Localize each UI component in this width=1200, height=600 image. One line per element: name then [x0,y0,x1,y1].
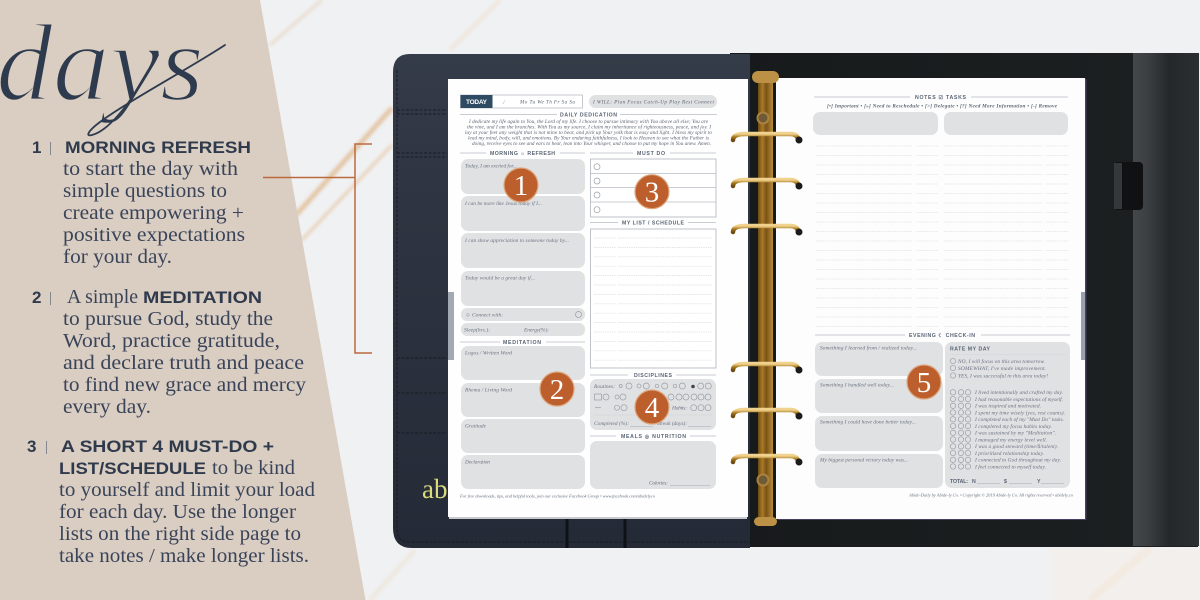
morning refresh heading: MORNING ☼ REFRESH [490,151,555,157]
disciplines box [590,379,716,430]
rings [733,134,798,462]
right tab [1081,292,1085,360]
item 3 text: to be kind [212,457,295,479]
item 3 text [27,437,315,567]
item 3 text: take notes / make longer lists. [59,545,309,567]
item 1 text: positive expectations [63,224,245,246]
title flourish [88,45,225,135]
binder spine strip [1133,53,1199,546]
badge 2 [540,372,574,406]
notes legend: [•] Important • [»] Need to Reschedule • [>] Delegate • [?] Need More Information • [-] Remove [827,104,1058,110]
rate my day panel: I prioritized relationship today. [974,451,1044,457]
dedication paragraph: lead my mind, body, will, and emotions. By Your enduring faithfulness, I look to Heaven to see what the Father is [468,134,709,142]
evening boxes: Something I learned from / realized today... [820,344,917,352]
rate my day panel: NO, I will focus on this area tomorrow. [957,358,1045,365]
notes and tasks heading: NOTES ☑ TASKS [915,95,967,101]
left page [448,79,748,519]
rate my day panel: $ [1004,479,1007,485]
spine bar [758,76,773,525]
morning refresh boxes: Today, I am excited for... [465,162,517,170]
meditation heading [460,340,585,346]
item 1 text: for your day. [63,246,172,268]
left tab [448,292,454,360]
rate my day panel: I spent my time wisely (yes, rest counts). [974,409,1065,416]
item 3 text: LIST/SCHEDULE [59,459,206,478]
item 3 text: lists on the right side page to [59,523,301,545]
must do heading: MUST DO [637,151,665,157]
item 1 text: 1 [32,138,41,157]
disciplines heading [590,373,716,379]
item 1 text: simple questions to [63,180,227,202]
rate my day panel: N [972,479,976,485]
notes rows [816,146,1069,326]
today box [460,95,582,108]
right page [776,78,1086,520]
rate my day panel: I connected to God throughout my day. [974,458,1061,464]
disciplines box: Routines: [593,384,615,390]
morning refresh boxes: I can show appreciation to someone today by... [464,238,569,244]
meditation boxes: Gratitude [465,424,487,430]
script title: days [0,2,204,124]
rate my day panel: I lived intentionally and crafted my day. [974,389,1063,396]
item 3 text: for each day. Use the longer [59,501,296,523]
today box: Mo Tu We Th Fr Sa Su [519,100,575,106]
item 1 text: create empowering + [63,202,244,224]
morning refresh boxes: I can be more like Jesus today if I... [464,200,542,207]
beige side panel [0,0,366,600]
top cap [752,71,779,83]
evening boxes: My biggest personal victory today was... [819,458,908,464]
my list heading [590,220,716,226]
meals heading: MEALS ◎ NUTRITION [621,434,686,440]
item 1 text [32,138,251,268]
item 2 text: A simple [67,286,138,308]
badge 3 [635,175,669,209]
disciplines heading: DISCIPLINES [634,373,673,379]
morning refresh boxes: ☺ Connect with: [465,312,503,318]
evening boxes [815,342,943,488]
item 3 text: 3 [27,437,36,456]
item 2 text: 2 [32,288,41,307]
dedication paragraph [465,118,712,147]
rate my day panel: I was inspired and motivated. [974,404,1041,410]
badge 4 [635,390,669,424]
pen loop tab [1114,162,1143,210]
disciplines box: Streak (days): [657,420,687,427]
morning refresh boxes: Today would be a great day if... [465,274,535,282]
evening check-in heading: EVENING ☾ CHECK-IN [909,333,975,339]
rate my day panel: YES, I was successful in this area today! [958,372,1048,380]
rate my day panel: I completed my focus habits today. [974,423,1052,430]
disciplines box: Habits: [671,406,687,412]
badge 5 [907,365,941,399]
item 3 text: to yourself and limit your load [59,479,315,501]
rivets [758,112,768,486]
item 1 text: MORNING REFRESH [65,138,251,157]
morning refresh boxes: Energy(%): [523,326,549,334]
must do box [590,159,716,217]
meals box: Calories: [649,480,668,486]
meditation boxes: Rhema / Living Word [464,388,512,394]
badge 2: 2 [550,374,564,406]
rate my day panel: I was a good steward (time/$/talent). [974,443,1058,450]
meditation heading: MEDITATION [503,340,541,346]
ring holes [796,136,802,466]
morning refresh heading [460,151,585,157]
rate my day panel: I had reasonable expectations of myself. [974,396,1063,403]
item 1 text: to start the day with [63,158,238,180]
left page sheet [448,79,748,517]
dedication paragraph: the vine, and I am the branches. With You as my source, I claim my inheritance of righteousness, peace, and joy. I [467,124,711,130]
binder [393,53,1199,548]
item 2 text [32,286,306,418]
right footer: Abide-Daily by Abide-ly Co. • Copyright © 2019 Abide-ly Co. All rights reserved • abidely.co [908,492,1074,498]
rate my day panel: SOMEWHAT, I've made improvement. [958,366,1046,372]
meals box [590,441,716,489]
item 2 text: and declare truth and peace [63,352,304,374]
item 2 text: | [49,290,52,306]
bottom cap [754,517,777,526]
rate my day panel: I was sustained by my "Meditation". [974,430,1056,436]
disciplines box: Completed (%): [594,420,629,427]
my list heading: MY LIST / SCHEDULE [622,220,685,226]
item 2 text: to pursue God, study the [63,308,273,330]
gold binder rings [733,71,802,526]
meditation boxes: Declaration [464,460,490,466]
item 2 text: to find new grace and mercy [63,374,306,396]
meals heading [590,434,716,440]
daily dedication heading: DAILY DEDICATION [560,112,617,118]
badge 3: 3 [645,176,659,208]
item 3 text: | [45,439,48,455]
item 2 text: MEDITATION [143,288,262,307]
my list box [590,229,716,368]
binder stitching [397,70,750,548]
item 3 text: A SHORT 4 MUST-DO + [61,437,274,456]
badge 5: 5 [917,367,931,399]
morning refresh boxes: Sleep(hrs.): [464,326,490,334]
bracket connector [263,144,372,353]
notes header boxes [813,112,1068,135]
badge 4: 4 [645,392,660,424]
must do heading [590,151,716,157]
rate my day panel: I managed my energy level well. [974,437,1047,443]
morning refresh boxes [461,159,585,336]
rate my day panel: Y [1037,479,1041,485]
today box: TODAY [466,99,488,106]
rate my day panel: RATE MY DAY [950,346,991,352]
item 1 text: | [49,140,52,156]
today box: / [502,100,505,106]
badge 1: 1 [514,170,528,202]
dedication paragraph: I dedicate my life again to You, the Lord of my life. I choose to pursue intimacy with You above all else; You are [468,118,709,125]
dedication paragraph: doing, receive eyes to see and ears to hear, lean into Your whisper, and choose to put my hope in You anew. Amen. [472,141,711,147]
binder left cover [393,54,750,548]
rate my day panel: I feel connected to myself today. [974,463,1046,470]
binder right cover [730,53,1198,547]
dedication paragraph: lay at your feet any weight that is not mine to bear, and pick up Your yolk that is easy and light. I bless my spirit to [465,129,712,136]
meditation boxes: Logos / Written Word [464,350,512,356]
rate my day panel [945,342,1070,488]
left footer: For free downloads, tips, and helpful tools, join our exclusive Facebook Group • www.facebook.com/abidelyco [459,494,656,500]
I will pill: I WILL: Plan Focus Catch-Up Play Rest Connect [592,100,715,106]
item 2 text: Word, practice gratitude, [63,330,280,352]
right page sheet [776,78,1085,519]
number badges [504,168,941,424]
I will pill [589,95,717,108]
evening boxes: Something I could have done better today... [820,420,916,426]
badge 1 [504,168,538,202]
rate my day panel: TOTAL: [950,479,968,485]
rate my day panel: I completed each of my "Must Do" tasks. [974,416,1064,423]
binder brand mark: ab [422,474,447,504]
item 2 text: every day. [63,396,151,418]
meditation boxes [461,346,585,489]
evening boxes: Something I handled well today... [820,382,894,388]
